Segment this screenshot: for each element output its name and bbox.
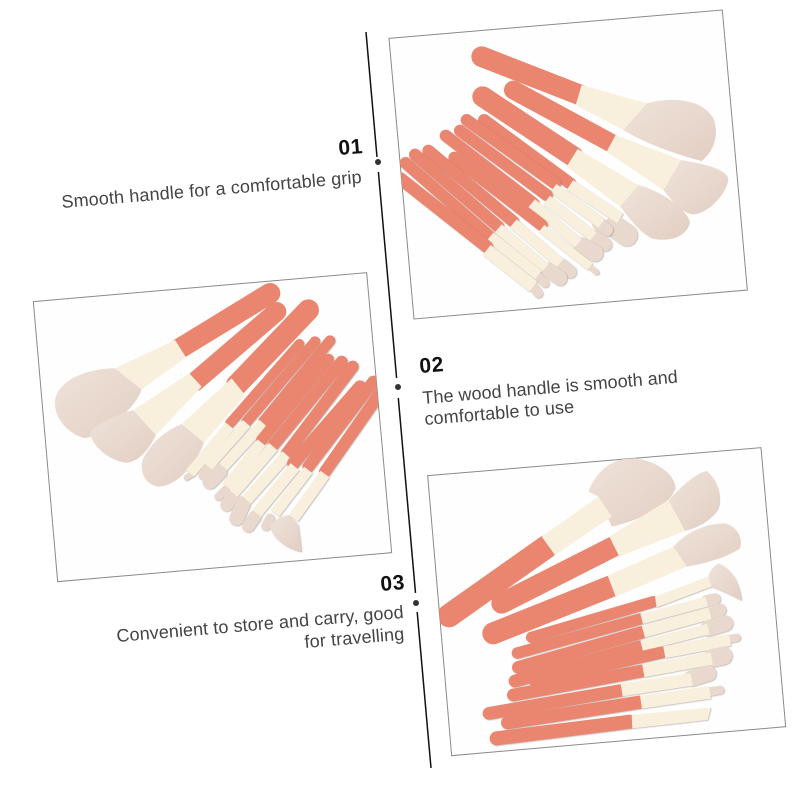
- callout 03: [116, 571, 419, 652]
- brush: large powder: [55, 293, 270, 438]
- panel: left photo of brushes: [33, 273, 392, 582]
- dot 03: [413, 600, 419, 606]
- brush: angled blush: [502, 471, 720, 603]
- brush: angled blush: [90, 312, 277, 463]
- text 02: The wood handle is smooth and: [422, 367, 678, 408]
- small brushes: [187, 341, 383, 552]
- brush: tapered face: [493, 523, 741, 633]
- text 02: [422, 367, 678, 429]
- number 01: 01: [337, 135, 364, 160]
- brush: angled blush: [513, 90, 728, 214]
- number 02: 02: [418, 353, 444, 378]
- text 03: for travelling: [304, 624, 405, 652]
- brush: large powder: [482, 57, 716, 161]
- panel: top right photo of brushes: [389, 10, 747, 319]
- text 02: comfortable to use: [424, 397, 575, 429]
- callout 01: [61, 135, 381, 212]
- panel: bottom right photo of brushes: [428, 448, 786, 756]
- dot 02: [395, 384, 401, 390]
- small brushes: [400, 120, 627, 293]
- vertical divider line: [366, 32, 431, 768]
- number 03: 03: [379, 571, 405, 596]
- text 03: Convenient to store and carry, good: [116, 602, 404, 646]
- small brushes: [489, 563, 742, 738]
- dot 01: [375, 159, 381, 165]
- callout 02: [395, 353, 678, 429]
- brush: tapered face: [142, 310, 308, 487]
- brush: tapered face: [483, 97, 690, 240]
- brush: large powder: [449, 458, 676, 616]
- text 01: Smooth handle for a comfortable grip: [61, 167, 362, 212]
